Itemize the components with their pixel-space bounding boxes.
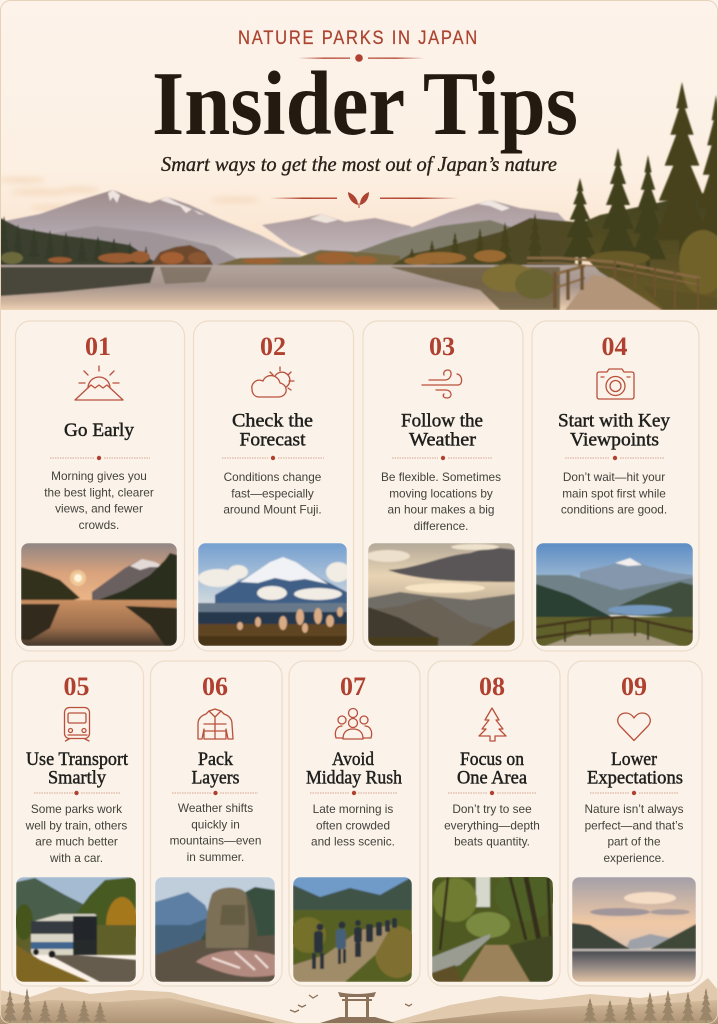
- photo: sun through clouds: [366, 543, 515, 646]
- body text: difference.: [414, 519, 468, 533]
- main title: Insider Tips: [152, 53, 578, 154]
- body text: main spot first while: [562, 486, 666, 500]
- body text: and less scenic.: [311, 835, 395, 849]
- icon: pine tree: [479, 708, 506, 741]
- heading: Go Early: [64, 421, 135, 441]
- photo: backpack on rock: [155, 877, 275, 982]
- number 04: 04: [602, 332, 628, 361]
- photo: lake at dusk: [572, 877, 696, 982]
- body text: [381, 470, 501, 533]
- header landscape illustration: [1, 82, 717, 310]
- divider: [448, 791, 536, 795]
- body text: [223, 470, 322, 517]
- heading: [232, 412, 313, 450]
- body text: Nature isn’t always: [584, 802, 684, 816]
- body text: often crowded: [316, 818, 390, 832]
- kicker: nature parks in japan: NATURE PARKS IN JAPAN: [238, 28, 479, 49]
- heading: [558, 412, 671, 450]
- heading: Midday Rush: [306, 768, 402, 788]
- heading: [26, 750, 129, 788]
- heading: Viewpoints: [570, 430, 659, 450]
- icon: train: [64, 708, 90, 741]
- heading: Lower: [611, 750, 657, 770]
- top divider: [298, 54, 424, 62]
- icon: cloud and sun: [252, 367, 294, 397]
- heading: Avoid: [332, 750, 375, 770]
- icon: jacket: [198, 709, 233, 739]
- body text: mountains—even: [170, 834, 261, 848]
- heading: Follow the: [401, 412, 483, 432]
- icon: heart: [618, 713, 650, 740]
- body text: fast—especially: [231, 486, 314, 500]
- icon: sunrise over mountain: [75, 366, 123, 400]
- body text: [561, 470, 667, 517]
- photo: bus on mountain road: [15, 877, 138, 982]
- divider: [222, 456, 324, 460]
- photo: viewpoint over lake: [536, 543, 693, 646]
- icon: camera: [597, 369, 634, 399]
- card 05: [12, 661, 144, 986]
- footer landscape with torii gate: [0, 978, 718, 1024]
- body text: moving locations by: [389, 486, 493, 500]
- body text: Don’t try to see: [452, 802, 532, 816]
- body text: Late morning is: [313, 802, 393, 816]
- heading: Pack: [198, 750, 234, 770]
- body text: [584, 802, 684, 865]
- heading: Forecast: [240, 430, 306, 450]
- card 08: [428, 661, 560, 986]
- number 09: 09: [621, 672, 647, 701]
- card 06: [150, 661, 282, 986]
- body text: part of the: [607, 835, 661, 849]
- body text: an hour makes a big: [388, 503, 494, 517]
- body text: everything—depth: [444, 818, 540, 832]
- card 09: [568, 661, 702, 986]
- body text: Some parks work: [31, 802, 122, 816]
- heading: [192, 750, 240, 788]
- divider: [34, 791, 120, 795]
- card 01: [16, 321, 184, 651]
- card 07: [289, 661, 420, 986]
- body text: Conditions change: [224, 470, 322, 484]
- card 03: [363, 321, 523, 651]
- heading: Use Transport: [26, 750, 129, 770]
- number 07: 07: [340, 672, 366, 701]
- left mountains: [0, 987, 300, 1024]
- divider: [565, 456, 665, 460]
- icon: birds: [290, 995, 412, 1012]
- heading: [587, 750, 683, 788]
- body text: [444, 802, 540, 849]
- right mountains: [385, 978, 718, 1024]
- icon: torii gate: [320, 992, 395, 1023]
- body text: [44, 469, 154, 532]
- heading: One Area: [457, 768, 527, 788]
- body text: well by train, others: [25, 818, 127, 832]
- body text: are much better: [35, 835, 118, 849]
- body text: conditions are good.: [561, 503, 667, 517]
- body text: perfect—and that’s: [585, 818, 683, 832]
- subtitle: Smart ways to get the most out of Japan’s nature: [161, 152, 557, 176]
- divider: [590, 791, 679, 795]
- number 02: 02: [260, 332, 286, 361]
- body text: [170, 801, 261, 864]
- body text: Don’t wait—hit your: [563, 470, 665, 484]
- body text: Be flexible. Sometimes: [381, 470, 501, 484]
- icon: group of people: [335, 708, 372, 739]
- divider: [172, 791, 258, 795]
- body text: [311, 802, 395, 849]
- divider: [392, 456, 493, 460]
- divider: [50, 456, 150, 460]
- lower divider with leaf icon: [270, 192, 458, 208]
- number 08: 08: [479, 672, 505, 701]
- photo: Mount Fuji with clouds: [198, 543, 350, 646]
- body text: with a car.: [49, 851, 103, 865]
- body text: crowds.: [79, 518, 119, 532]
- photo: crowded trail: [290, 877, 419, 982]
- heading: [306, 750, 402, 788]
- heading: [401, 412, 483, 450]
- heading: Weather: [409, 430, 476, 450]
- card 02: [194, 321, 354, 651]
- number 03: 03: [429, 332, 455, 361]
- photo: forest path: [432, 869, 555, 982]
- heading: Layers: [192, 768, 240, 788]
- heading: Focus on: [460, 750, 524, 770]
- heading: Smartly: [48, 768, 107, 788]
- icon: wind: [422, 370, 462, 398]
- card 04: [532, 321, 699, 651]
- body text: the best light, clearer: [44, 485, 154, 499]
- body text: Morning gives you: [51, 469, 147, 483]
- body text: beats quantity.: [454, 835, 530, 849]
- body text: around Mount Fuji.: [223, 503, 322, 517]
- number 06: 06: [202, 672, 228, 701]
- number 01: 01: [85, 332, 111, 361]
- number 05: 05: [64, 672, 90, 701]
- body text: quickly in: [191, 817, 240, 831]
- body text: [25, 802, 127, 865]
- photo: sunrise lake: [21, 543, 177, 646]
- heading: Expectations: [587, 768, 683, 788]
- heading: Start with Key: [558, 412, 671, 432]
- divider: [310, 791, 397, 795]
- body text: Weather shifts: [178, 801, 253, 815]
- heading: Check the: [232, 412, 313, 432]
- body text: views, and fewer: [55, 502, 143, 516]
- body text: in summer.: [187, 850, 244, 864]
- body text: experience.: [604, 851, 664, 865]
- heading: [457, 750, 527, 788]
